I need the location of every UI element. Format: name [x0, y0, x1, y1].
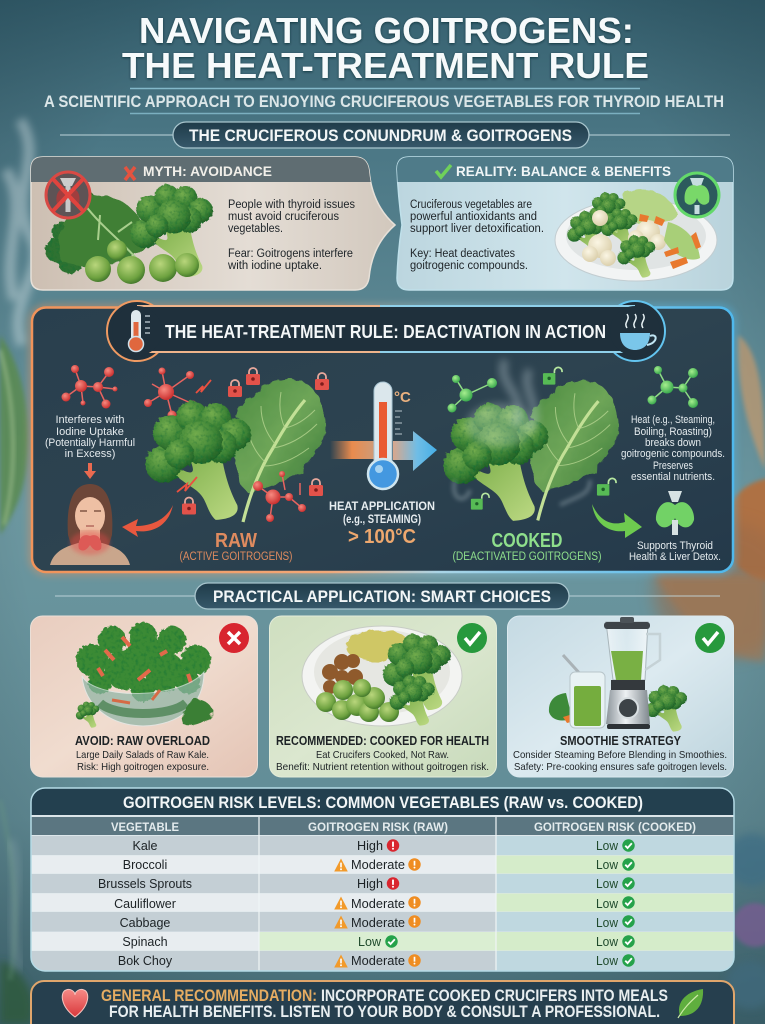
deactivation text: breaks down: [645, 437, 701, 449]
recommended text: Eat Crucifers Cooked, Not Raw.: [316, 749, 449, 761]
card: smoothie strategy: [508, 616, 734, 777]
reality text: powerful antioxidants and: [410, 211, 537, 223]
table: goitrogen risk levels: [31, 788, 734, 971]
row: Brussels Sprouts: High: [357, 877, 383, 891]
table title: GOITROGEN RISK LEVELS: COMMON VEGETABLES (RAW vs. COOKED): [123, 794, 643, 812]
cooked plate: [302, 626, 462, 726]
row: Kale: High: [357, 839, 383, 853]
recommended text: RECOMMENDED: COOKED FOR HEALTH: [276, 733, 489, 748]
smoothie text: [513, 733, 727, 773]
badge: cross: [219, 623, 249, 653]
cooked label: (DEACTIVATED GOITROGENS): [452, 551, 602, 563]
row: Brussels Sprouts: Low: [596, 877, 619, 891]
myth text: with iodine uptake.: [227, 260, 322, 272]
raw broccoli and kale: [145, 379, 325, 522]
row: Cauliflower: Cauliflower: [114, 897, 176, 911]
arrow: raw to thyroid: [122, 505, 173, 537]
deactivation text: Heat (e.g., Steaming,: [631, 414, 715, 426]
title: THE HEAT-TREATMENT RULE: [122, 45, 649, 86]
reality text: [410, 199, 544, 272]
row: Bok Choy: Moderate: [351, 954, 405, 968]
woman with inflamed thyroid: [50, 484, 130, 565]
section heading: conundrum: THE CRUCIFEROUS CONUNDRUM & GOITROGENS: [189, 126, 572, 145]
recommended text: Benefit: Nutrient retention without goitrogen risk.: [276, 761, 489, 773]
table header row: GOITROGEN RISK (COOKED): [534, 820, 696, 834]
raw label: (ACTIVE GOITROGENS): [180, 551, 293, 563]
cooked broccoli and kale with steam: [443, 360, 618, 521]
row: Cabbage: Low: [596, 916, 619, 930]
arrow: cooked to thyroid: [592, 504, 642, 538]
smoothie text: SMOOTHIE STRATEGY: [560, 733, 681, 748]
recommendation text: GENERAL RECOMMENDATION:: [101, 987, 317, 1005]
deactivation text: Boiling, Roasting): [634, 426, 712, 438]
row: Spinach: Low: [596, 935, 619, 949]
panel: heat-treatment rule: [32, 301, 733, 572]
row: Bok Choy: Low: [596, 954, 619, 968]
red molecule near broccoli: [144, 368, 196, 420]
row: Broccoli: [123, 858, 635, 872]
deactivation text: [621, 414, 725, 483]
section heading: practical application: PRACTICAL APPLICATION: SMART CHOICES: [213, 587, 551, 606]
heat banner: [107, 301, 665, 361]
row: Brussels Sprouts: Brussels Sprouts: [98, 877, 192, 891]
row: Kale: Low: [596, 839, 619, 853]
heat application text: > 100°C: [348, 526, 416, 548]
myth text: Fear: Goitrogens interfere: [228, 248, 353, 260]
cooked label: COOKED: [492, 530, 562, 552]
icon: leaf: [678, 989, 703, 1018]
row: Spinach: Low: [358, 935, 382, 949]
myth text: [227, 199, 355, 272]
interference text: Interferes with: [55, 414, 125, 426]
interference text: Iodine Uptake: [56, 426, 124, 438]
row: Spinach: Spinach: [122, 935, 168, 949]
row: Bok Choy: Bok Choy: [118, 954, 173, 968]
green molecule, right: [648, 366, 698, 408]
avoid text: [75, 733, 210, 773]
row: Broccoli: Low: [596, 858, 619, 872]
reality text: Key: Heat deactivates: [410, 248, 515, 260]
avoid text: Large Daily Salads of Raw Kale.: [76, 749, 209, 761]
card: avoid raw overload: [30, 616, 258, 777]
raw label: [180, 530, 293, 563]
reality text: Cruciferous vegetables are: [410, 199, 532, 211]
recommendation text: INCORPORATE COOKED CRUCIFERS INTO MEALS: [321, 987, 668, 1005]
table header row: GOITROGEN RISK (RAW): [308, 820, 448, 834]
icon: red molecule, left: [62, 365, 118, 408]
raw label: RAW: [215, 530, 257, 552]
avoid text: AVOID: RAW OVERLOAD: [75, 733, 210, 748]
heat application text: [329, 499, 435, 548]
interference text: (Potentially Harmful: [45, 437, 135, 449]
recommendation text: FOR HEALTH BENEFITS. LISTEN TO YOUR BODY & CONSULT A PROFESSIONAL.: [109, 1003, 660, 1021]
row: Cauliflower: Moderate: [351, 897, 405, 911]
heat application text: (e.g., STEAMING): [343, 512, 421, 526]
lightning marks: [177, 380, 211, 492]
row: Cabbage: Moderate: [351, 916, 405, 930]
padlocks: [182, 368, 329, 514]
row: Kale: Kale: [132, 839, 158, 853]
reality text: support liver detoxification.: [410, 223, 544, 235]
reality text: goitrogenic compounds.: [410, 260, 528, 272]
section heading: conundrum: [60, 122, 730, 148]
row: Cauliflower: Low: [596, 897, 619, 911]
interference text: in Excess): [65, 448, 115, 460]
deactivation text: essential nutrients.: [631, 471, 715, 483]
icon: crossed thyroid: [46, 172, 90, 218]
avoid text: Risk: High goitrogen exposure.: [77, 761, 209, 773]
icon: healthy thyroid: [675, 173, 719, 217]
red molecule on kale: [253, 471, 306, 522]
title: [122, 10, 649, 86]
heat application text: HEAT APPLICATION: [329, 499, 435, 513]
badge: check: [695, 623, 725, 653]
smoothie text: Safety: Pre-cooking ensures safe goitrogen levels.: [514, 761, 727, 773]
blender and smoothie: [549, 617, 687, 732]
recommended text: [276, 733, 489, 773]
icon: steaming cup: [620, 314, 656, 350]
row: Cabbage: Cabbage: [120, 916, 170, 930]
section heading: practical application: [55, 583, 720, 609]
myth text: must avoid cruciferous: [228, 211, 339, 223]
icon: heart: [62, 989, 88, 1017]
support text: [629, 540, 721, 563]
row: Spinach: [122, 935, 635, 949]
cooked label: [452, 530, 602, 563]
table header row: VEGETABLE: [111, 820, 179, 834]
unlocked padlocks: [471, 367, 616, 510]
heat arrow and thermometer: °C: [394, 389, 411, 406]
card: cooked for health: [270, 616, 496, 777]
deactivation text: goitrogenic compounds.: [621, 448, 725, 460]
green molecule, cooked left: [448, 375, 497, 412]
row: Bok Choy: [118, 954, 635, 968]
myth text: People with thyroid issues: [228, 199, 355, 211]
icon: thermometer: [128, 310, 150, 352]
illustration: kale, broccoli, sprouts: [45, 184, 213, 284]
support text: Supports Thyroid: [637, 540, 713, 552]
heat arrow and thermometer: [330, 382, 437, 489]
reality heading: REALITY: BALANCE & BENEFITS: [456, 163, 671, 179]
arrow: to thyroid: [84, 463, 96, 479]
table header row: [111, 820, 696, 834]
row: Cabbage: [120, 915, 635, 930]
panel: reality: [395, 157, 735, 290]
panel: myth: [31, 157, 395, 290]
row: Cauliflower: [114, 896, 635, 911]
myth heading: MYTH: AVOIDANCE: [143, 163, 272, 179]
row: Brussels Sprouts: [98, 877, 635, 891]
icon: healthy thyroid glow: [656, 491, 694, 535]
interference text: [45, 414, 135, 460]
smoothie text: Consider Steaming Before Blending in Smoothies.: [513, 749, 727, 761]
banner: general recommendation: [31, 981, 734, 1024]
myth text: vegetables.: [228, 223, 283, 235]
heat banner: THE HEAT-TREATMENT RULE: DEACTIVATION IN ACTION: [165, 322, 606, 342]
row: Broccoli: Moderate: [351, 858, 405, 872]
row: Kale: [132, 839, 635, 853]
support text: Health & Liver Detox.: [629, 551, 721, 563]
recommendation text: [101, 987, 668, 1021]
illustration: vegetable plate: [555, 190, 717, 281]
row: Broccoli: Broccoli: [123, 858, 167, 872]
salad bowl: [76, 622, 212, 728]
badge: check: [457, 623, 487, 653]
deactivation text: Preserves: [653, 460, 693, 472]
title: NAVIGATING GOITROGENS:: [139, 10, 634, 51]
